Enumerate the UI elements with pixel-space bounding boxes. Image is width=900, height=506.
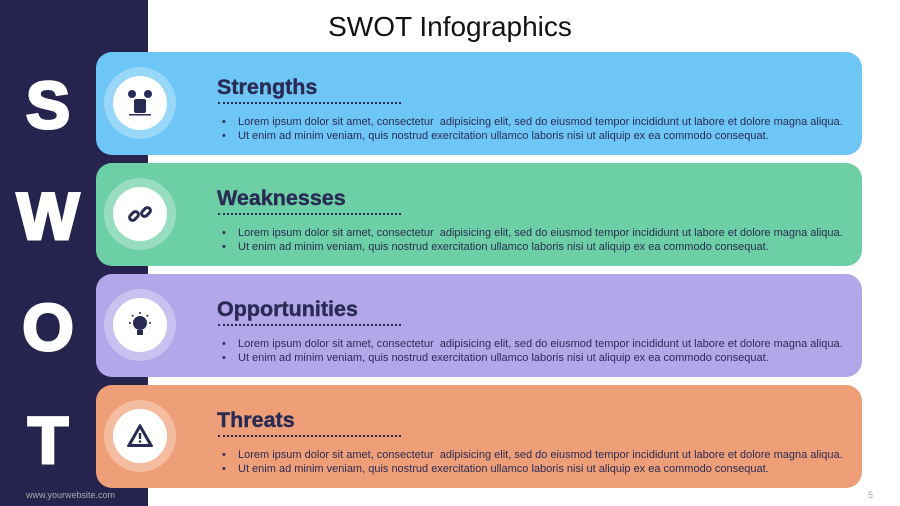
text: Ut enim ad minim veniam, quis nostrud exercitation ullamco laboris nisi ut aliquip ex ea commodo consequat.: [238, 463, 769, 475]
letter O: O: [22, 290, 74, 364]
text: •: [222, 463, 226, 475]
text: Ut enim ad minim veniam, quis nostrud exercitation ullamco laboris nisi ut aliquip ex ea commodo consequat.: [238, 130, 769, 142]
letter S: S: [26, 68, 70, 142]
text: •: [222, 352, 226, 364]
icon: light bulb: [104, 289, 176, 361]
heading: Threats: [217, 408, 295, 432]
text: Lorem ipsum dolor sit amet, consectetur adipisicing elit, sed do eiusmod tempor incididunt ut labore et dolore magna aliqua.: [238, 449, 843, 461]
text: •: [222, 241, 226, 253]
text: •: [222, 130, 226, 142]
icon: fist with coins: [104, 67, 176, 139]
letter W: W: [17, 179, 79, 253]
letter T: T: [28, 403, 68, 477]
text: Ut enim ad minim veniam, quis nostrud exercitation ullamco laboris nisi ut aliquip ex ea commodo consequat.: [238, 241, 769, 253]
heading: Weaknesses: [217, 186, 346, 210]
text: •: [222, 227, 226, 239]
text: Lorem ipsum dolor sit amet, consectetur adipisicing elit, sed do eiusmod tempor incididunt ut labore et dolore magna aliqua.: [238, 227, 843, 239]
footer url: www.yourwebsite.com: [26, 490, 115, 500]
sidebar: [0, 0, 148, 506]
icon: broken link: [104, 178, 176, 250]
text: [222, 116, 843, 142]
title: SWOT Infographics: [328, 11, 572, 42]
panel: threats: [96, 385, 862, 488]
icon: warning: [104, 400, 176, 472]
text: Lorem ipsum dolor sit amet, consectetur adipisicing elit, sed do eiusmod tempor incididunt ut labore et dolore magna aliqua.: [238, 116, 843, 128]
heading: Opportunities: [217, 297, 358, 321]
panel: opportunities: [96, 274, 862, 377]
text: •: [222, 338, 226, 350]
panel: strengths: [96, 52, 862, 155]
panel: weaknesses: [96, 163, 862, 266]
text: [222, 227, 843, 253]
page number: 5: [868, 490, 873, 500]
heading: Strengths: [217, 75, 317, 99]
text: Lorem ipsum dolor sit amet, consectetur adipisicing elit, sed do eiusmod tempor incididunt ut labore et dolore magna aliqua.: [238, 338, 843, 350]
text: •: [222, 116, 226, 128]
text: [222, 449, 843, 475]
text: Ut enim ad minim veniam, quis nostrud exercitation ullamco laboris nisi ut aliquip ex ea commodo consequat.: [238, 352, 769, 364]
text: [222, 338, 843, 364]
text: •: [222, 449, 226, 461]
